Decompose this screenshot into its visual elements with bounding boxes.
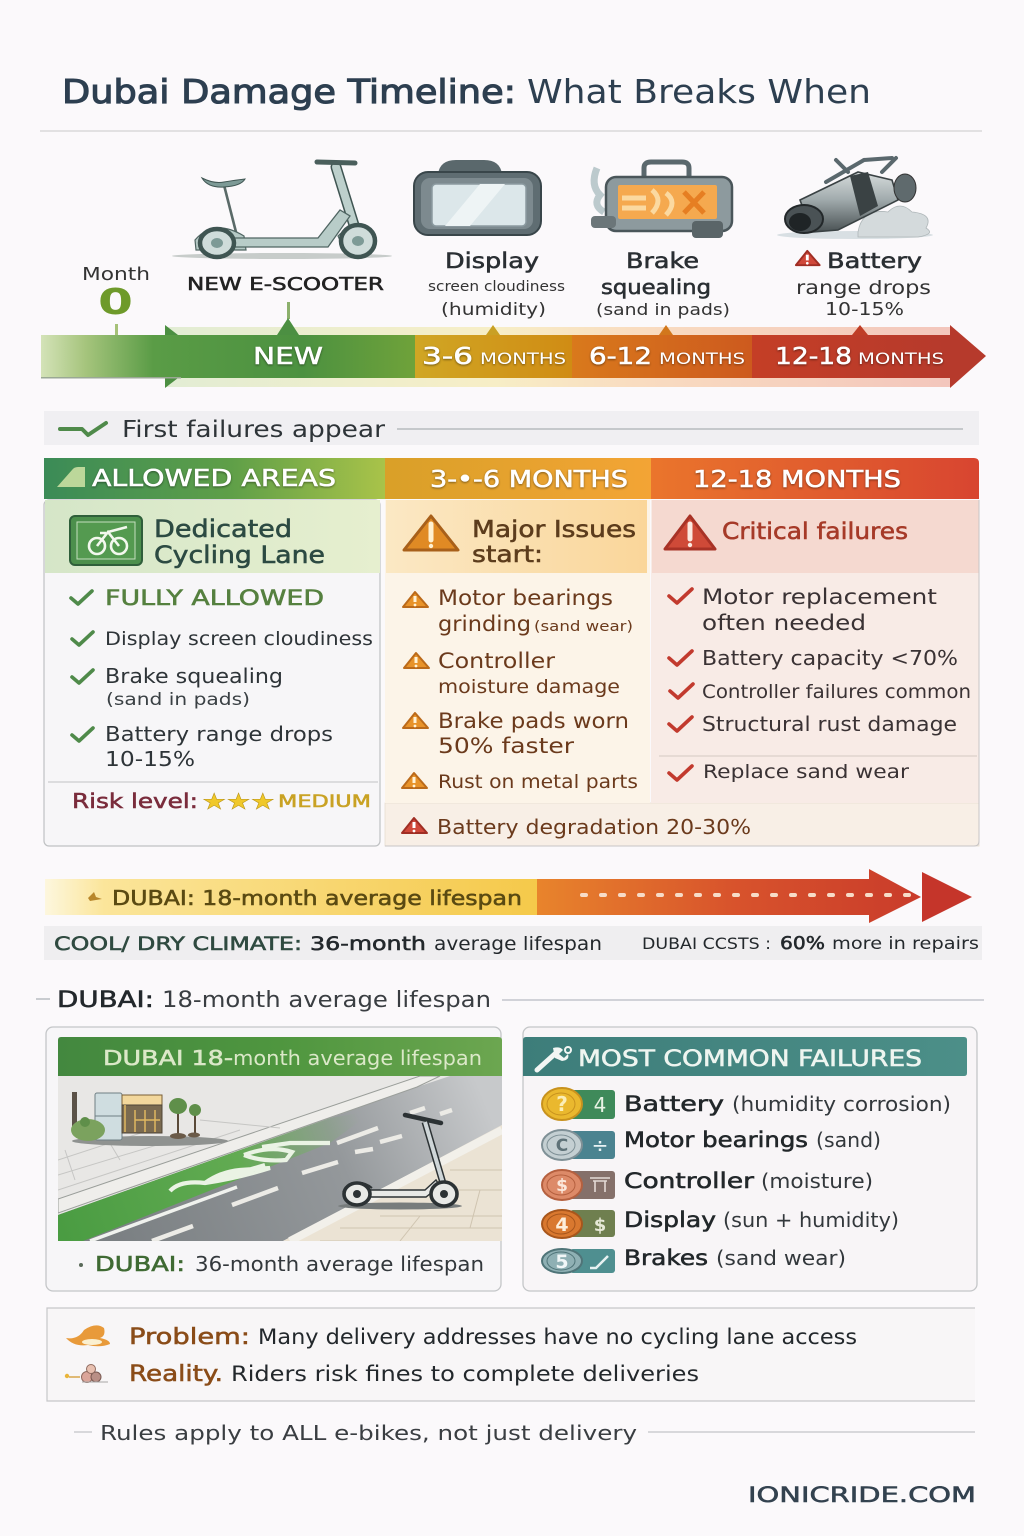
callout: problem and reality: Riders risk fines to complete deliveries xyxy=(231,1362,699,1386)
panel: 3-6 months: Major Issues xyxy=(472,517,636,543)
panel: allowed areas: Cycling Lane xyxy=(154,541,325,569)
first failures banner xyxy=(44,411,979,445)
timeline labels: 0 xyxy=(98,282,133,323)
caption: 36-month average lifespan xyxy=(195,1252,484,1276)
climate comparison row: 60% xyxy=(780,933,825,954)
list: allowed items xyxy=(71,586,373,771)
failure 2: motor bearings: Motor bearings xyxy=(624,1128,808,1152)
panel: most common failures: MOST COMMON FAILURES xyxy=(578,1047,922,1072)
caption xyxy=(79,1252,484,1276)
failure 3: controller: $ xyxy=(556,1176,568,1196)
section heading: lifespan: DUBAI: xyxy=(57,988,154,1013)
risk level: ★★★ xyxy=(202,790,275,815)
list: major issues: (sand wear) xyxy=(534,619,633,635)
caption: DUBAI: xyxy=(95,1252,185,1276)
failure 3: controller xyxy=(542,1169,873,1200)
title: What Breaks When xyxy=(527,72,871,111)
icon: brake xyxy=(591,162,732,238)
panel: allowed areas xyxy=(44,458,385,846)
callout: problem and reality xyxy=(47,1308,975,1401)
timeline labels: Battery xyxy=(827,249,922,273)
failure 3: controller: Controller xyxy=(624,1169,754,1193)
failure 4: display: Display xyxy=(624,1208,716,1232)
failure 4: display: 4 xyxy=(555,1214,569,1236)
list: allowed items: 10-15% xyxy=(105,747,195,771)
timeline labels: squealing xyxy=(601,275,711,299)
climate comparison row xyxy=(44,926,982,960)
icon: critical warning xyxy=(665,516,715,549)
timeline labels xyxy=(82,249,931,323)
failure 5: brakes: (sand wear) xyxy=(716,1246,846,1270)
timeline arrow xyxy=(41,302,986,388)
climate comparison row: 36-month xyxy=(310,933,426,955)
icon: cycling lane xyxy=(70,516,142,565)
timeline arrow: 12-18 xyxy=(775,344,852,370)
failure 5: brakes: Brakes xyxy=(624,1246,708,1270)
timeline labels: (sand in pads) xyxy=(596,300,730,319)
timeline labels: (humidity) xyxy=(441,300,546,320)
list: allowed items: (sand in pads) xyxy=(106,690,250,710)
list: critical failures: Controller failures common xyxy=(702,681,971,703)
failure 4: display: $ xyxy=(594,1215,606,1236)
callout: problem and reality: Many delivery addresses have no cycling lane access xyxy=(258,1325,857,1349)
lifespan arrow xyxy=(45,869,972,923)
list: major issues: grinding xyxy=(438,612,531,636)
title xyxy=(62,72,871,111)
failure 2: motor bearings: (sand) xyxy=(816,1128,881,1152)
failure 1: battery: ? xyxy=(556,1092,568,1116)
list: critical failures: Replace sand wear xyxy=(703,761,909,783)
list: major issues: Brake pads worn xyxy=(438,709,629,733)
panel: cycling lane scene xyxy=(46,1027,502,1291)
icon: display xyxy=(414,160,541,235)
timeline arrow: MONTHS xyxy=(659,349,745,368)
icon: battery motor xyxy=(777,158,933,239)
climate comparison row: more in repairs xyxy=(832,934,979,954)
timeline labels: 10-15% xyxy=(825,299,904,320)
climate comparison row: COOL/ DRY CLIMATE: xyxy=(54,933,302,955)
failure 3: controller: (moisture) xyxy=(761,1169,873,1193)
icon: new e-scooter xyxy=(172,162,392,259)
failure 2: motor bearings xyxy=(542,1128,881,1160)
timeline arrow: MONTHS xyxy=(858,349,944,368)
panel: 3-6 months: 3-•-6 MONTHS xyxy=(430,467,628,493)
failure 4: display xyxy=(542,1208,899,1238)
failure 4: display: (sun + humidity) xyxy=(723,1208,899,1232)
timeline labels: Month xyxy=(82,264,150,285)
list: critical failures: Structural rust damage xyxy=(702,712,957,736)
list: major issues: Controller xyxy=(438,649,555,673)
timeline labels: screen cloudiness xyxy=(428,279,565,295)
icon: major warning xyxy=(404,516,458,550)
section heading: lifespan: 18-month average lifespan xyxy=(162,988,491,1013)
brand: IONICRIDE.COM xyxy=(748,1483,976,1507)
risk level: MEDIUM xyxy=(278,792,371,812)
failure 1: battery: Battery xyxy=(624,1092,724,1116)
list: allowed items: Battery range drops xyxy=(105,722,333,746)
illustration: parked scooter xyxy=(338,1115,462,1210)
illustration: road with bike lane xyxy=(58,1076,502,1241)
icon: problem xyxy=(66,1325,110,1346)
title: Dubai Damage Timeline: xyxy=(62,72,516,111)
list: major issues: Motor bearings xyxy=(438,586,613,610)
list: major issues xyxy=(402,586,638,793)
climate comparison row: average lifespan xyxy=(434,933,602,955)
failure 1: battery xyxy=(542,1088,951,1120)
list: critical failures: Battery capacity <70% xyxy=(702,646,958,670)
climate comparison row: DUBAI CCSTS : xyxy=(642,934,771,953)
timeline arrow: NEW xyxy=(253,344,323,370)
panel: allowed areas: Dedicated xyxy=(154,515,292,543)
timeline labels: Display xyxy=(445,249,539,273)
failure 1: battery: (humidity corrosion) xyxy=(732,1092,951,1116)
first failures banner: First failures appear xyxy=(122,417,386,443)
timeline labels: Brake xyxy=(626,249,699,273)
panel: cycling lane scene: DUBAI 18- xyxy=(103,1046,233,1070)
failure 2: motor bearings: C xyxy=(556,1136,568,1156)
panel: most common failures xyxy=(523,1027,977,1291)
timeline arrow: 6-12 xyxy=(589,344,652,370)
callout: problem and reality: Problem: xyxy=(129,1325,250,1350)
failure 5: brakes xyxy=(542,1246,846,1273)
risk level: Risk level: xyxy=(72,789,198,813)
list: major issues: Rust on metal parts xyxy=(438,771,638,793)
panel: 12-18 months: 12-18 MONTHS xyxy=(693,467,901,493)
failure 2: motor bearings: ÷ xyxy=(592,1133,608,1157)
section heading: lifespan xyxy=(36,988,984,1013)
risk level xyxy=(72,789,371,815)
timeline arrow: 3-6 xyxy=(422,344,473,370)
list: allowed items: FULLY ALLOWED xyxy=(105,586,324,610)
footnote: Rules apply to ALL e-bikes, not just delivery xyxy=(100,1421,637,1445)
timeline arrow: MONTHS xyxy=(480,349,566,368)
battery degradation row: Battery degradation 20-30% xyxy=(437,815,751,839)
panel: cycling lane scene: month average lifespan xyxy=(233,1046,482,1070)
callout: problem and reality: Reality. xyxy=(129,1362,223,1387)
panel: 3-6 months xyxy=(385,458,979,846)
panel: allowed areas: ALLOWED AREAS xyxy=(92,466,336,492)
list: major issues: 50% faster xyxy=(438,734,574,758)
icon: wrench xyxy=(537,1047,571,1070)
icon: reality xyxy=(65,1364,108,1382)
illustration: kiosk and trees xyxy=(71,1092,228,1146)
timeline labels: NEW E-SCOOTER xyxy=(187,274,384,295)
panel: 3-6 months: start: xyxy=(472,542,543,568)
list: critical failures xyxy=(659,585,977,783)
failure 5: brakes: 5 xyxy=(555,1251,569,1273)
lifespan arrow: DUBAI: 18-month average lifespan xyxy=(112,886,522,910)
list: allowed items: Display screen cloudiness xyxy=(105,628,373,650)
failure 1: battery: 4 xyxy=(594,1093,606,1117)
list: critical failures: often needed xyxy=(702,611,866,635)
panel: 12-18 months: Critical failures xyxy=(722,519,908,545)
list: critical failures: Motor replacement xyxy=(702,585,937,609)
list: major issues: moisture damage xyxy=(438,676,620,698)
list: allowed items: Brake squealing xyxy=(105,664,283,688)
panel: 12-18 months xyxy=(385,458,979,846)
timeline labels: range drops xyxy=(796,277,931,299)
